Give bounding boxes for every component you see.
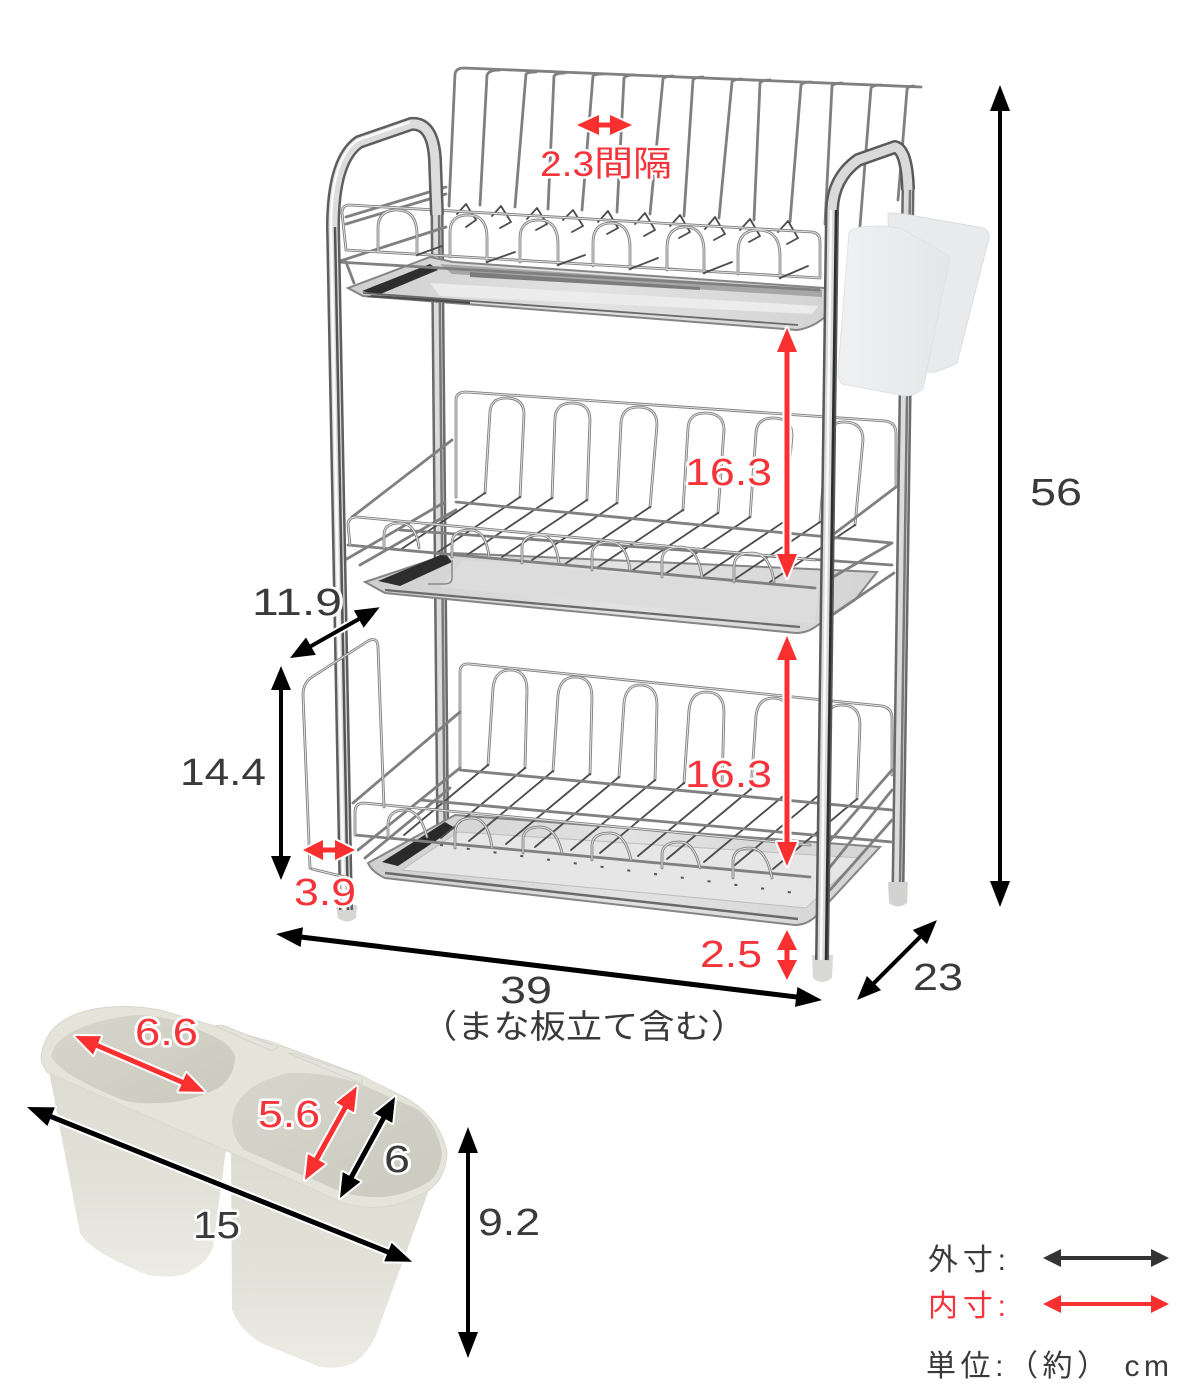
cutlery holder close-up xyxy=(23,1006,447,1368)
dimension: back plate wire spacing xyxy=(540,115,672,184)
dimension: cup outer width 6: 6 xyxy=(384,1139,410,1181)
dimension: cup length 15: 15 xyxy=(193,1205,240,1247)
dimension: cup height 9.2: 9.2 xyxy=(478,1202,540,1244)
white cutlery holder xyxy=(838,213,989,396)
dimension: total height 56 xyxy=(990,85,1082,907)
dimension: upper tier clearance 16.3: 16.3 xyxy=(685,452,772,494)
rear right post and foot xyxy=(888,190,910,906)
dimension: cup opening 6.6 xyxy=(71,1012,208,1101)
cup: rim xyxy=(41,1006,447,1208)
dimension: tray bottom clearance 2.5 xyxy=(700,930,797,980)
dimension: tray bottom clearance 2.5: 2.5 xyxy=(700,934,762,976)
dimension: board stand depth 11.9: 11.9 xyxy=(252,582,342,624)
dimension: cup length 15 xyxy=(23,1098,416,1271)
dimension: depth 23 xyxy=(850,913,963,1007)
top tier: back plate rack xyxy=(449,68,921,244)
dimension: board stand height 14.4 xyxy=(180,666,291,880)
cup: left opening xyxy=(51,1015,235,1103)
legend: inner dimension xyxy=(928,1290,1169,1323)
dimension: overall width 39 including board stand: 39 xyxy=(500,970,552,1012)
dimension: depth 23: 23 xyxy=(913,957,963,999)
dimension: board stand width 3.9 xyxy=(294,840,356,914)
label: 2.3 spacing: 2.3間隔 xyxy=(540,145,672,184)
cup: left body xyxy=(48,1066,228,1277)
dimension: board stand depth 11.9 xyxy=(252,582,385,667)
dimension: upper tier clearance 16.3 xyxy=(685,328,797,578)
dimension: lower tier clearance 16.3 xyxy=(685,636,797,866)
dimension: overall width 39 including board stand: （まな板立て含む） xyxy=(421,1008,747,1045)
front right post with handle and foot xyxy=(812,147,908,982)
product photo: three-tier dish rack xyxy=(303,68,989,982)
cup: back hooks xyxy=(215,1025,362,1084)
cup: right opening xyxy=(232,1073,442,1197)
cup: right body xyxy=(231,1150,430,1368)
legend: outer dimension: 外寸: xyxy=(928,1244,1006,1277)
bottom tier: wire rack xyxy=(353,664,892,890)
legend: inner dimension: 内寸: xyxy=(928,1290,1006,1323)
middle tier: drip tray xyxy=(365,553,877,633)
dimension: board stand height 14.4: 14.4 xyxy=(180,752,266,794)
arrow: wire spacing xyxy=(577,115,632,135)
legend: outer dimension xyxy=(928,1244,1169,1277)
cup: gap between cups xyxy=(225,1158,231,1248)
bottom tier: drip tray xyxy=(368,815,880,925)
dimension: cup height 9.2 xyxy=(458,1127,540,1358)
legend: unit note: 単位:（約） cm xyxy=(926,1350,1169,1383)
front left post with handle and foot xyxy=(331,122,437,922)
dimension: board stand width 3.9: 3.9 xyxy=(294,872,356,914)
rear left post xyxy=(437,210,445,870)
dimension: cup opening 6.6: 6.6 xyxy=(135,1012,198,1054)
dimension: cup inner width 5.6: 5.6 xyxy=(258,1094,320,1136)
cutting board stand xyxy=(303,640,384,877)
dimension: cup outer width 6 xyxy=(331,1092,410,1203)
dimension: overall width 39 including board stand xyxy=(275,924,823,1045)
middle tier: wire rack xyxy=(345,392,896,613)
legend xyxy=(926,1244,1169,1383)
dimension: total height 56: 56 xyxy=(1030,472,1082,514)
dimension: lower tier clearance 16.3: 16.3 xyxy=(685,754,772,796)
top tier: drip tray xyxy=(348,257,825,330)
top tier: front rails and humps xyxy=(337,187,820,290)
dimension: cup inner width 5.6 xyxy=(258,1082,366,1185)
